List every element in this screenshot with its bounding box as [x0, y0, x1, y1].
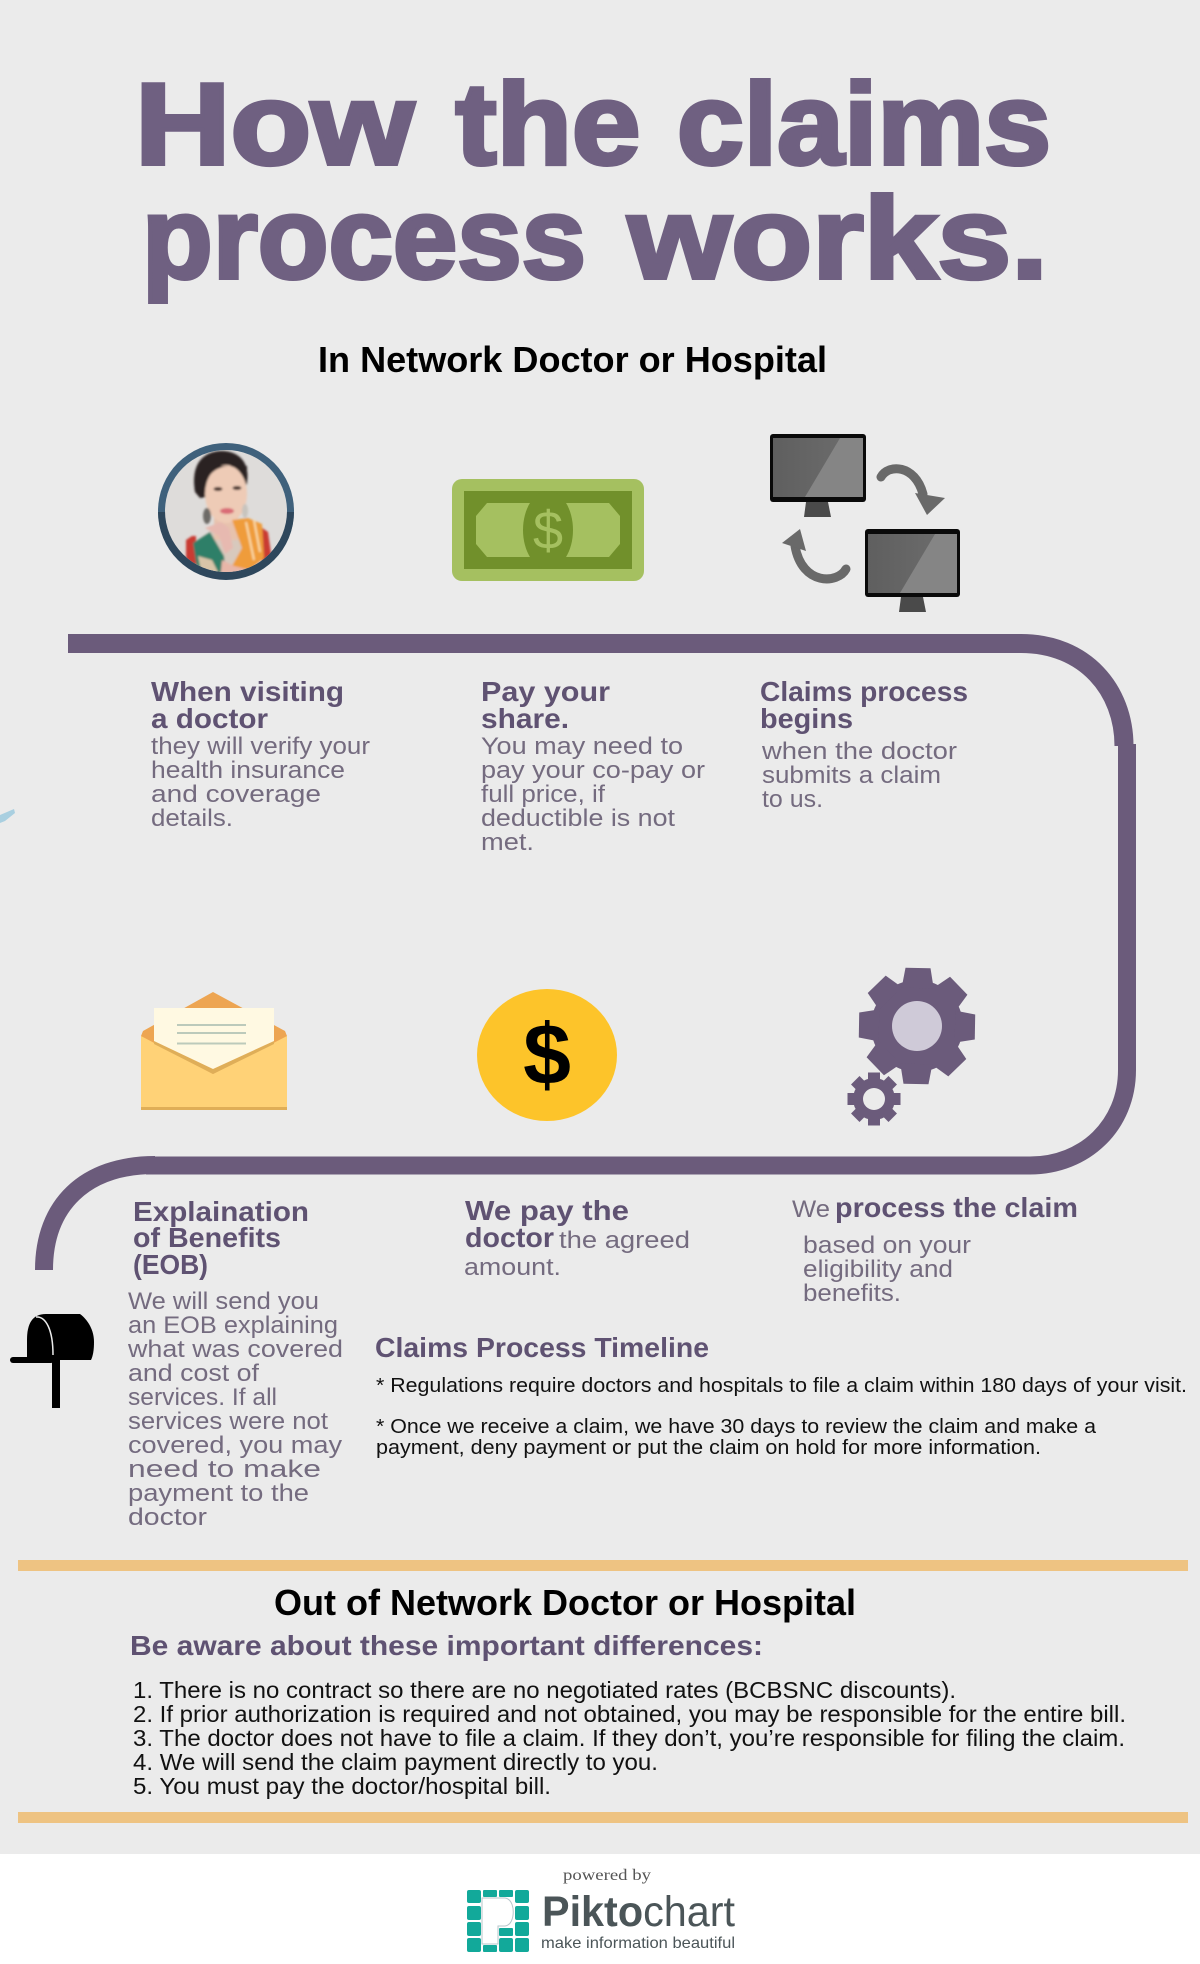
text block: claims process timeline: Claims Process Timeline [375, 1332, 709, 1363]
piktochart wordmark: Piktochart [542, 1888, 735, 1936]
step: we process the claim [792, 1192, 1078, 1307]
icon: piktochart logo [467, 1890, 529, 1952]
step: claims process begins: when the doctor [761, 738, 957, 765]
step: claims process begins: submits a claim [762, 762, 941, 789]
step: claims process begins: to us. [762, 786, 823, 813]
step: explanation of benefits: Explaination [133, 1196, 309, 1227]
icon: monitors with sync arrows [770, 434, 960, 612]
step: explanation of benefits [127, 1196, 343, 1531]
step: explanation of benefits: of Benefits [133, 1222, 281, 1253]
heading: out of network: Out of Network Doctor or Hospital [274, 1582, 856, 1623]
title: How [135, 59, 415, 189]
icon: dollar coin: $ [523, 1007, 571, 1103]
list: out of network differences: 2. If prior authorization is required and not obtained, you may be responsible for the entire bill. [133, 1701, 1126, 1727]
step: explanation of benefits: covered, you may [128, 1432, 342, 1459]
title: claims [677, 59, 1051, 189]
icon: mailbox [10, 1314, 94, 1408]
text block: claims process timeline: * Regulations require doctors and hospitals to file a claim within 180 days of your visit. [376, 1375, 1187, 1397]
step: we pay the doctor [464, 1195, 690, 1281]
step: we process the claim: process the claim [835, 1192, 1078, 1223]
step: pay your share: deductible is not [481, 805, 675, 832]
step: pay your share: share. [481, 703, 569, 734]
step: we pay the doctor: We pay the [465, 1195, 629, 1226]
step: we process the claim: We [792, 1196, 830, 1223]
step: when visiting a doctor: and coverage [151, 781, 321, 808]
step: claims process begins [760, 676, 968, 813]
step: when visiting a doctor: they will verify your [151, 733, 370, 760]
step: when visiting a doctor: a doctor [151, 703, 268, 734]
step: when visiting a doctor: details. [151, 805, 233, 832]
list: out of network differences: 4. We will send the claim payment directly to you. [133, 1749, 658, 1775]
text block: claims process timeline: * Once we receive a claim, we have 30 days to review the claim and make a [376, 1416, 1097, 1438]
step: pay your share: Pay your [481, 676, 610, 707]
step: explanation of benefits: (EOB) [133, 1249, 208, 1280]
step: explanation of benefits: need to make [128, 1456, 321, 1483]
subheading: differences: Be aware about these important differences: [130, 1630, 763, 1661]
step: explanation of benefits: an EOB explaining [128, 1312, 338, 1339]
title: works. [627, 173, 1048, 303]
icon: dollar bill: $ [533, 501, 563, 561]
step: explanation of benefits: and cost of [128, 1360, 259, 1387]
step: pay your share: pay your co-pay or [481, 757, 705, 784]
title: the [456, 59, 640, 189]
step: we process the claim: benefits. [803, 1280, 901, 1307]
list: out of network differences: 5. You must pay the doctor/hospital bill. [133, 1773, 551, 1799]
step: claims process begins: begins [760, 703, 853, 734]
step: pay your share: You may need to [481, 733, 683, 760]
text block: claims process timeline [375, 1332, 1187, 1459]
step: when visiting a doctor: When visiting [151, 676, 344, 707]
list: out of network differences: 3. The doctor does not have to file a claim. If they don’t, you’re responsible for filing the claim. [133, 1725, 1125, 1751]
title [135, 59, 1051, 303]
footer label: powered by [563, 1867, 651, 1884]
icon: dollar coin [477, 989, 617, 1121]
icon: gears [848, 968, 975, 1126]
list: out of network differences [133, 1677, 1126, 1799]
step: explanation of benefits: payment to the [128, 1480, 309, 1507]
icon: doctor portrait [158, 443, 294, 580]
icon: envelope [141, 992, 287, 1110]
step: we process the claim: based on your [803, 1232, 971, 1259]
step: we pay the doctor: doctor [465, 1222, 554, 1253]
step: explanation of benefits: services were not [128, 1408, 328, 1435]
step: pay your share: met. [481, 829, 534, 856]
step: pay your share: full price, if [481, 781, 605, 808]
step: when visiting a doctor: health insurance [151, 757, 345, 784]
icon: dollar bill [452, 479, 644, 581]
step: we pay the doctor: amount. [464, 1254, 561, 1281]
step: explanation of benefits: doctor [128, 1504, 207, 1531]
step: claims process begins: Claims process [760, 676, 968, 707]
subtitle: in network: In Network Doctor or Hospital [318, 339, 827, 380]
footer: powered by piktochart [0, 1854, 1200, 1964]
list: out of network differences: 1. There is no contract so there are no negotiated rates (BCBSNC discounts). [133, 1677, 956, 1703]
process path line [44, 644, 1127, 1270]
step: pay your share [481, 676, 705, 856]
title: process [142, 173, 586, 303]
step: explanation of benefits: services. If all [128, 1384, 277, 1411]
decorative flourish at left edge [0, 809, 15, 823]
step: we process the claim: eligibility and [803, 1256, 953, 1283]
step: when visiting a doctor [151, 676, 370, 832]
step: explanation of benefits: We will send you [128, 1288, 319, 1315]
step: we pay the doctor: the agreed [559, 1227, 690, 1254]
step: explanation of benefits: what was covered [127, 1336, 343, 1363]
piktochart tagline: make information beautiful [541, 1935, 735, 1952]
text block: claims process timeline: payment, deny payment or put the claim on hold for more information. [376, 1437, 1041, 1459]
